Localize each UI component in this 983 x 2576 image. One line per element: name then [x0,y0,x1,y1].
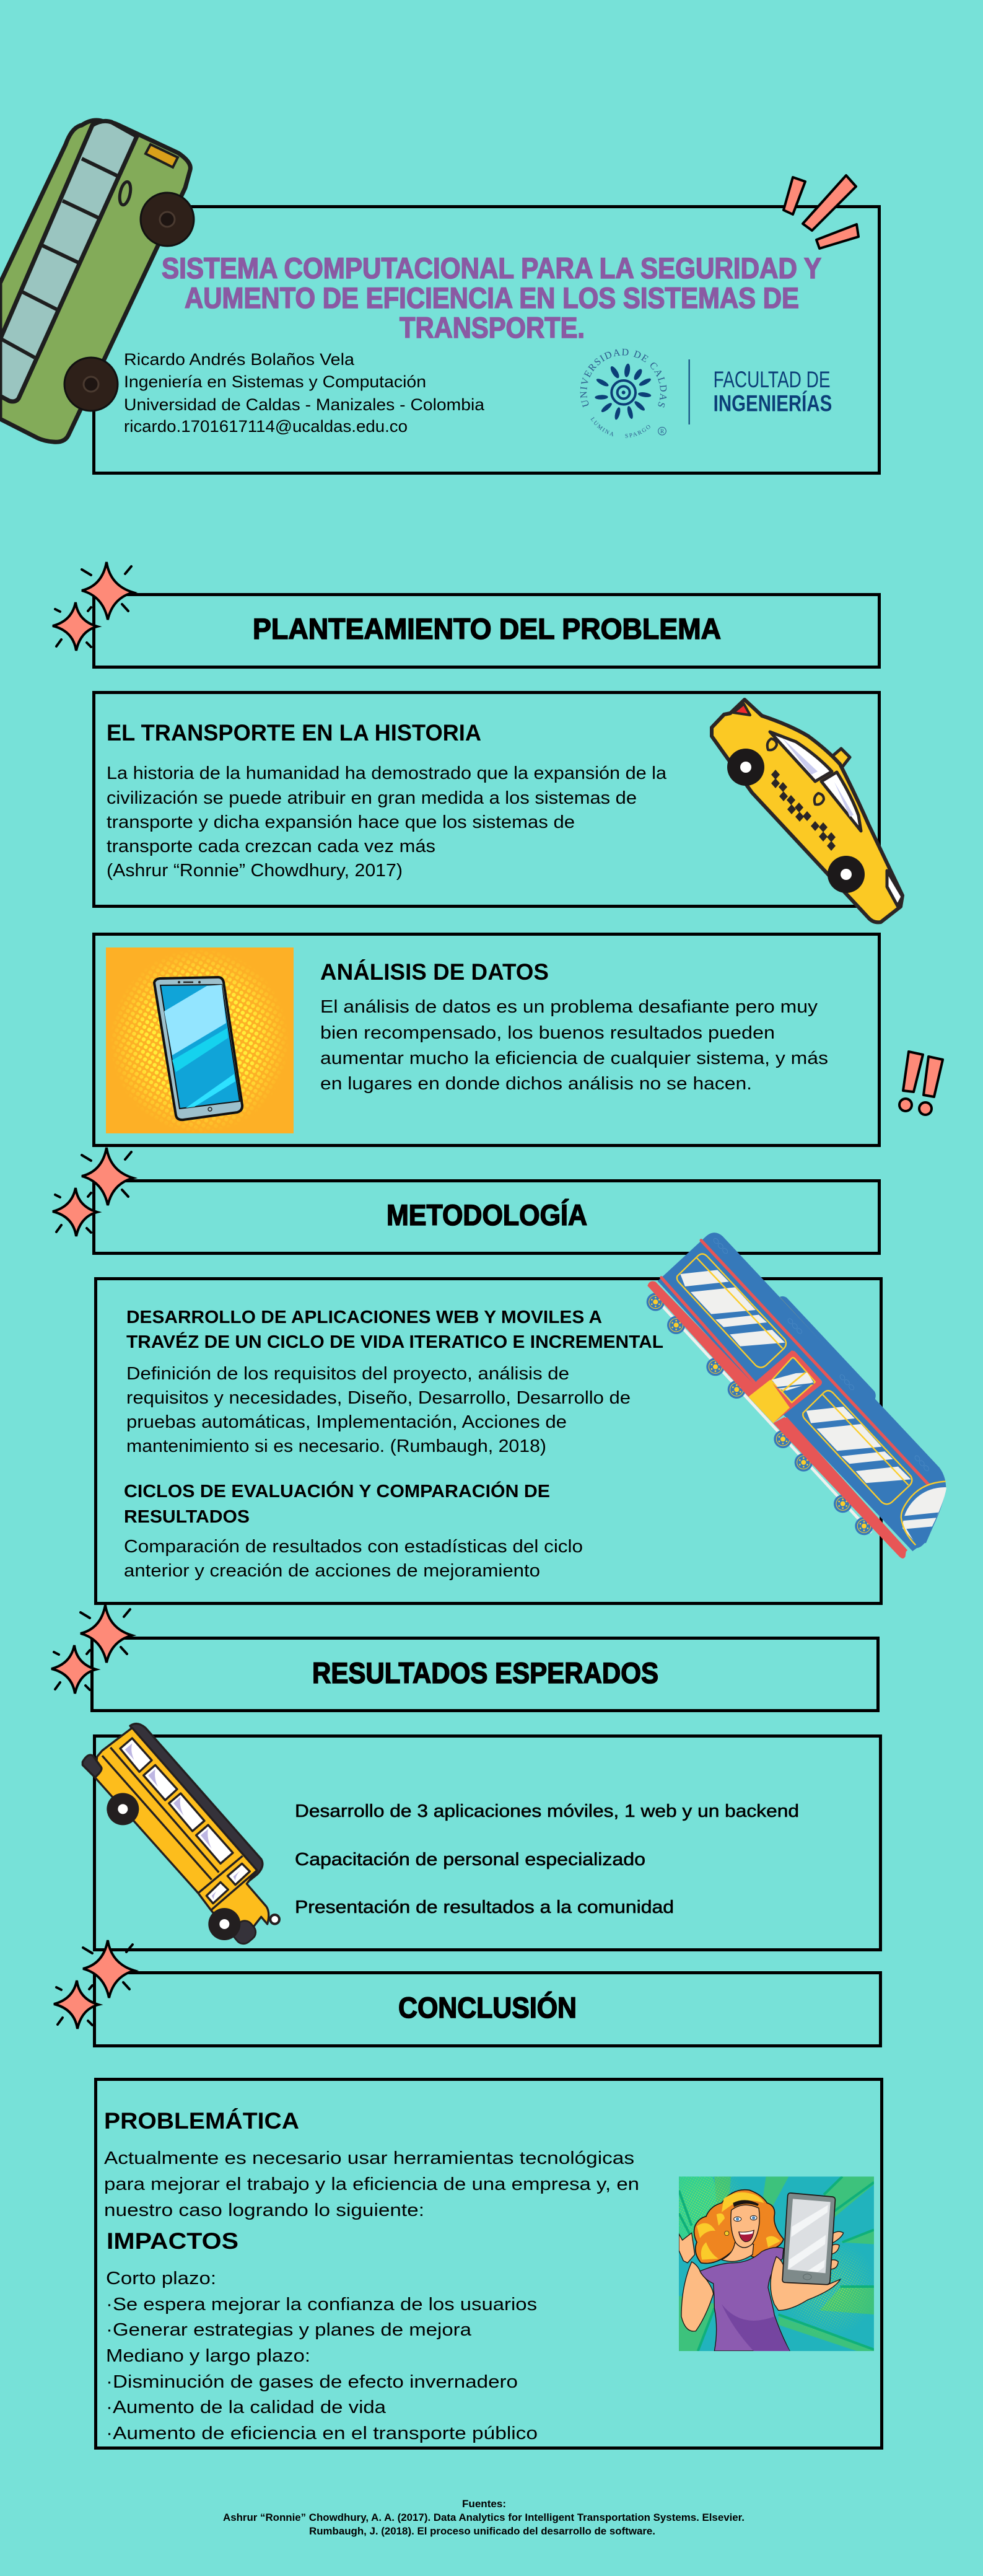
text: historia [107,763,667,881]
author details: Universidad de Caldas - Manizales - Colombia [124,395,485,414]
heading: desarrollo de aplicaciones [126,1308,663,1352]
text: comparacion: Comparación de resultados con estadísticas del ciclo [124,1537,583,1557]
text: requisitos: mantenimiento si es necesario. (Rumbaugh, 2018) [126,1436,546,1456]
icon: double exclamation [899,1052,943,1115]
icon: sparkles planteamiento [53,562,133,651]
panel: resultados esperados heading: RESULTADOS ESPERADOS [312,1656,658,1689]
panel: analisis de datos [94,934,880,1145]
panel: resultados content [94,1736,881,1950]
icon: sparkles conclusion [54,1940,134,2029]
title [162,252,821,344]
text: impactos [106,2269,538,2443]
title: SISTEMA COMPUTACIONAL PARA LA SEGURIDAD Y [162,252,821,284]
heading: desarrollo de aplicaciones: DESARROLLO DE APLICACIONES WEB Y MOVILES A [126,1308,602,1327]
text: analisis: El análisis de datos es un problema desafiante pero muy [320,997,818,1017]
logo: Universidad de Caldas, Facultad de Ingenierías: LUMINA SPARGO [591,416,650,437]
author details: Ricardo Andrés Bolaños Vela [124,350,355,369]
text: impactos: ·Generar estrategias y planes de mejora [106,2320,472,2340]
author details: Ingeniería en Sistemas y Computación [124,372,426,391]
text: analisis: aumentar mucho la eficiencia de cualquier sistema, y más [320,1048,828,1068]
text: problematica: Actualmente es necesario usar herramientas tecnológicas [104,2148,634,2168]
icon: yellow taxi [712,700,902,922]
panel: conclusion content [95,2080,882,2448]
panel: conclusion heading: CONCLUSIÓN [398,1991,577,2024]
text: requisitos: Definición de los requisitos del proyecto, análisis de [126,1364,569,1384]
panel: planteamiento del problema heading: PLANTEAMIENTO DEL PROBLEMA [253,612,721,645]
logo: Universidad de Caldas, Facultad de Ingenierías: INGENIERÍAS [714,390,832,416]
icon: school bus [82,1724,279,1947]
text: resultados list: Desarrollo de 3 aplicaciones móviles, 1 web y un backend [295,1801,799,1821]
heading: problematica: PROBLEMÁTICA [104,2108,299,2134]
image: phone on orange [106,947,294,1134]
logo: Universidad de Caldas, Facultad de Ingenierías: UNIVERSIDAD DE CALDAS [580,348,666,408]
text: impactos: Corto plazo: [106,2269,216,2288]
text: requisitos: requisitos y necesidades, Diseño, Desarrollo, Desarrollo de [126,1388,631,1408]
logo: Universidad de Caldas, Facultad de Ingenierías: FACULTAD DE [714,367,831,392]
sources [223,2498,745,2537]
sources: Rumbaugh, J. (2018). El proceso unificado del desarrollo de software. [309,2525,655,2537]
icon: pink burst marks [784,175,858,248]
text: impactos: ·Aumento de la calidad de vida [106,2398,387,2417]
text: resultados list [295,1801,799,1917]
icon: sparkles resultados [51,1605,132,1694]
text: historia: civilización se puede atribuir en gran medida a los sistemas de [107,788,637,808]
text: impactos: ·Se espera mejorar la confianza de los usuarios [106,2295,537,2314]
image: woman holding phone [675,2172,874,2351]
text: resultados list: Capacitación de personal especializado [295,1850,645,1870]
icon: sparkles metodologia [53,1148,133,1236]
text: problematica: nuestro caso logrando lo siguiente: [104,2200,424,2220]
panel: planteamiento del problema heading [94,595,880,667]
text: analisis: bien recompensado, los buenos resultados pueden [320,1023,775,1043]
sources: Ashrur “Ronnie” Chowdhury, A. A. (2017). Data Analytics for Intelligent Transportation Systems. Elsevier. [223,2512,745,2523]
title: TRANSPORTE. [400,311,585,344]
text: problematica [104,2148,639,2220]
panel: metodologia heading [94,1181,880,1253]
text: historia: La historia de la humanidad ha demostrado que la expansión de la [107,763,667,783]
heading: ciclos de evaluacion: RESULTADOS [124,1507,250,1527]
text: requisitos [126,1364,631,1456]
heading: impactos: IMPACTOS [107,2228,238,2254]
text: impactos: ·Aumento de eficiencia en el transporte público [106,2424,538,2443]
text: historia: transporte y dicha expansión hace que los sistemas de [107,812,575,832]
author details [124,350,485,436]
author details: ricardo.1701617114@ucaldas.edu.co [124,417,408,436]
heading: analisis de datos: ANÁLISIS DE DATOS [320,959,549,985]
logo: Universidad de Caldas, Facultad de Ingenierías [580,348,832,437]
text: comparacion: anterior y creación de acciones de mejoramiento [124,1561,540,1581]
text: resultados list: Presentación de resultados a la comunidad [295,1897,674,1917]
icon: train [647,1233,946,1558]
text: impactos: Mediano y largo plazo: [106,2346,310,2366]
text: requisitos: pruebas automáticas, Implementación, Acciones de [126,1412,567,1432]
heading: desarrollo de aplicaciones: TRAVÉZ DE UN CICLO DE VIDA ITERATICO E INCREMENTAL [126,1331,663,1352]
text: analisis: en lugares en donde dichos análisis no se hacen. [320,1074,752,1094]
panel: metodologia heading: METODOLOGÍA [387,1198,587,1231]
text: comparacion [124,1537,583,1581]
icon: green bus [0,120,194,442]
text: historia: transporte cada crezcan cada vez más [107,837,435,856]
panel: el transporte en la historia [94,693,880,906]
text: impactos: ·Disminución de gases de efecto invernadero [106,2372,518,2392]
sources: Fuentes: [462,2498,506,2510]
text: problematica: para mejorar el trabajo y la eficiencia de una empresa y, en [104,2174,639,2194]
panel: resultados esperados heading [92,1638,878,1710]
text: historia: (Ashrur “Ronnie” Chowdhury, 2017) [107,861,403,881]
heading: transporte en la historia: EL TRANSPORTE EN LA HISTORIA [107,720,481,745]
text: analisis [320,997,828,1094]
logo: Universidad de Caldas, Facultad de Ingenierías: R [660,429,665,435]
panel: metodologia content [95,1279,881,1604]
heading: ciclos de evaluacion: CICLOS DE EVALUACIÓN Y COMPARACIÓN DE [124,1480,550,1501]
title: AUMENTO DE EFICIENCIA EN LOS SISTEMAS DE [185,281,799,314]
heading: ciclos de evaluacion [124,1480,550,1527]
panel: header box [94,207,880,473]
panel: conclusion heading [94,1973,881,2046]
